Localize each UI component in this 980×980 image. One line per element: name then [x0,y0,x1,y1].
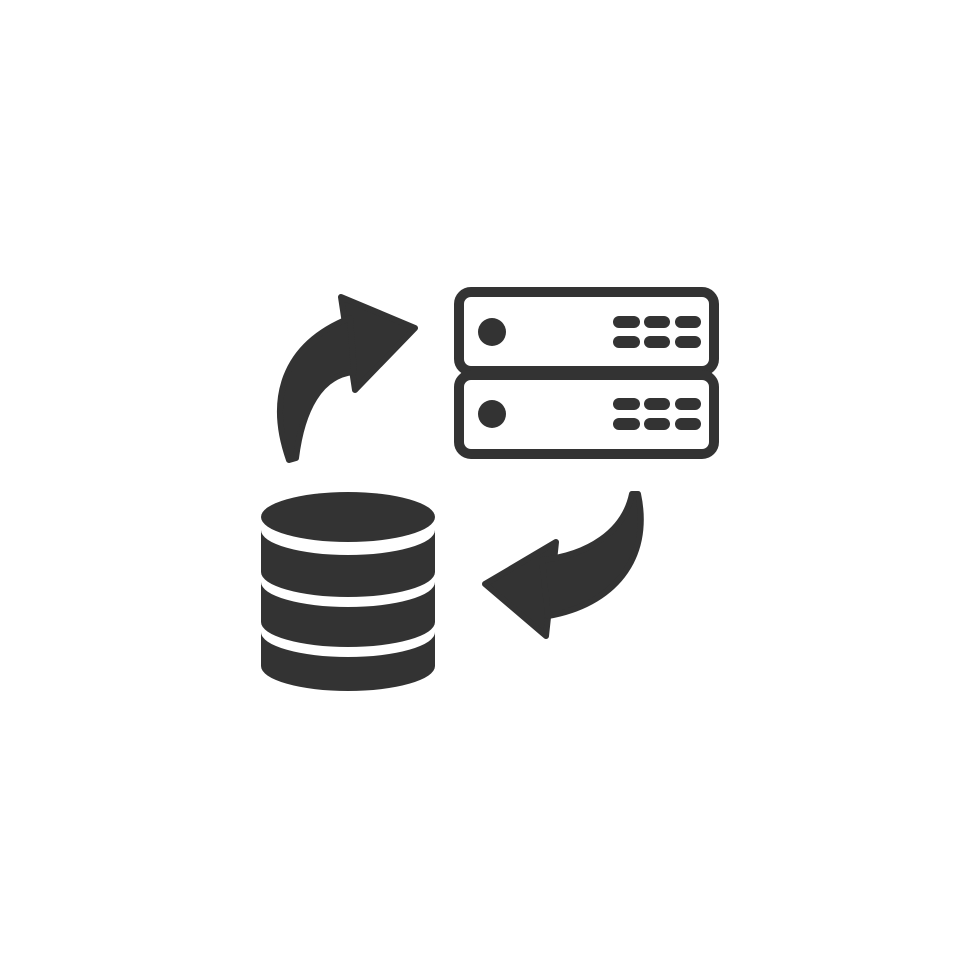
icon: database cylinder [261,492,435,691]
arrow: database to server [280,297,415,460]
icon: server rack [459,292,714,454]
arrow: server to database [485,494,641,636]
